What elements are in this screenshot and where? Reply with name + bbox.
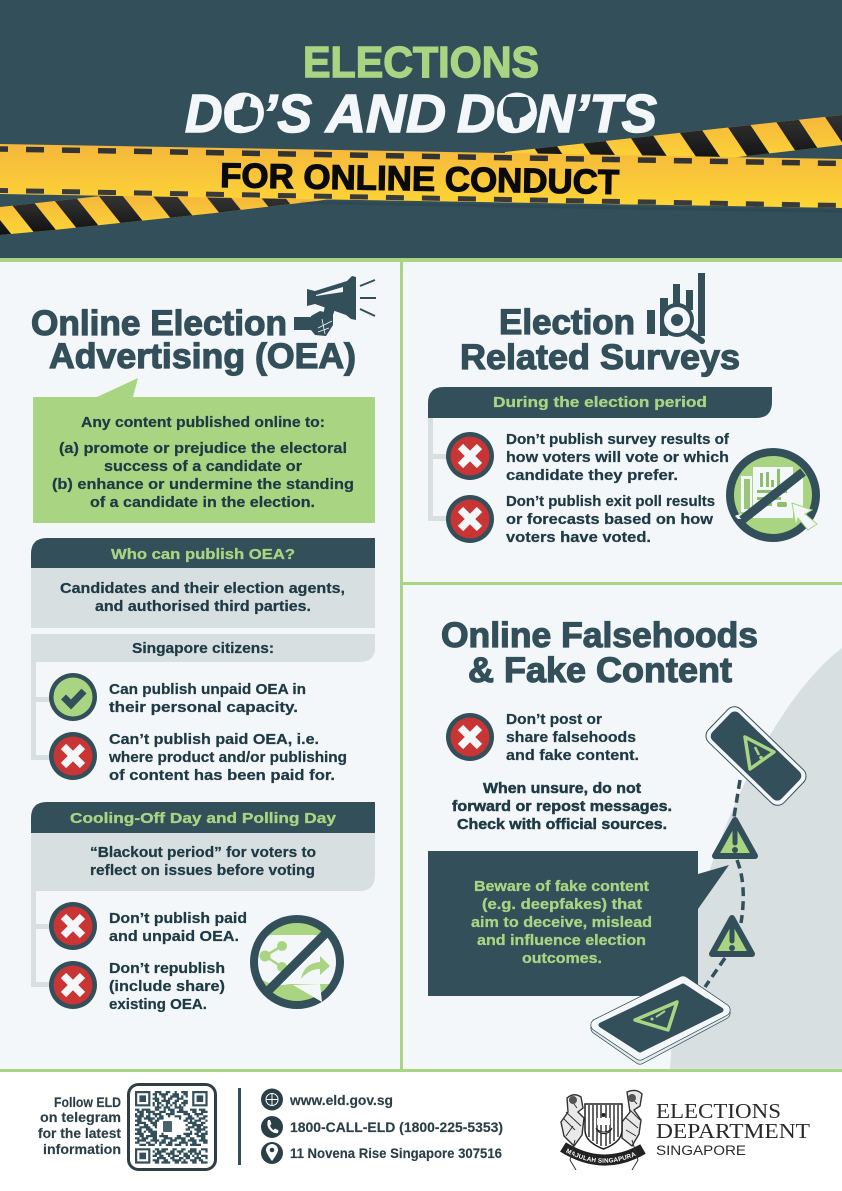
hazard tape front with text xyxy=(0,144,842,213)
connector xyxy=(428,418,448,521)
text: survey results: how voters will vote or which xyxy=(506,449,729,466)
shield xyxy=(585,1104,622,1149)
tape text: FOR ONLINE CONDUCT xyxy=(220,157,619,202)
page background panels xyxy=(0,258,842,1072)
icon: cross xyxy=(49,902,97,950)
banner xyxy=(563,1147,643,1160)
callout: beware of fake content: outcomes. xyxy=(522,950,602,967)
icon: globe xyxy=(261,1088,283,1110)
divider xyxy=(238,1088,241,1165)
icon: check xyxy=(49,673,97,721)
section: cooling-off day xyxy=(31,802,375,1013)
panel: online falsehoods xyxy=(428,616,842,1069)
callout: OEA definition: success of a candidate or xyxy=(104,458,302,475)
heading: election related surveys: Related Surveys xyxy=(460,338,740,377)
text: follow ELD: Follow ELD xyxy=(54,1095,121,1110)
heading: online election advertising: Advertising (OEA) xyxy=(49,337,356,376)
icon: no sharing xyxy=(254,919,342,1005)
icon: no survey publishing xyxy=(730,452,817,538)
text: follow ELD: for the latest xyxy=(38,1126,122,1141)
text: follow ELD: on telegram xyxy=(40,1110,121,1125)
callout: beware of fake content: Beware of fake content xyxy=(474,878,649,895)
icon: thumbs up in O xyxy=(224,92,264,132)
icon: phone bottom xyxy=(597,982,724,1058)
heading: election related surveys xyxy=(460,303,740,377)
icon: location pin xyxy=(261,1142,283,1164)
hazard tape behind, right piece xyxy=(505,115,842,158)
heading: election related surveys: Election xyxy=(499,303,635,342)
header: during the election period xyxy=(428,387,772,418)
panel dividers xyxy=(0,258,842,1072)
text: can publish xyxy=(109,681,306,716)
text: follow ELD xyxy=(38,1095,122,1157)
text: do not republish: existing OEA. xyxy=(109,996,207,1013)
text: do not republish: Don’t republish xyxy=(109,960,225,977)
title: ELECTIONS: ELECTIONS xyxy=(303,38,539,87)
header band xyxy=(0,0,842,258)
text: do not post: and fake content. xyxy=(506,747,639,764)
text: exit poll: Don’t publish exit poll results xyxy=(506,493,715,510)
callout: beware of fake content: and influence election xyxy=(477,932,646,949)
heading: online election advertising: Online Election xyxy=(31,304,287,343)
text: do not publish xyxy=(109,910,247,945)
text: survey results: Don’t publish survey results of xyxy=(506,431,730,448)
icon: cross xyxy=(446,432,494,480)
text: follow ELD: information xyxy=(43,1142,121,1157)
QR code xyxy=(128,1084,216,1170)
icon: chart with magnifier xyxy=(647,273,705,341)
logo text: ELECTIONS xyxy=(656,1099,781,1123)
text: exit poll xyxy=(506,493,715,546)
icon: cross xyxy=(446,713,494,761)
icon: cross xyxy=(49,961,97,1009)
callout: OEA definition xyxy=(33,378,375,523)
dashed route xyxy=(705,780,743,987)
logo: crest xyxy=(560,1090,646,1170)
text: do not publish: Don’t publish paid xyxy=(109,910,247,927)
section: singapore citizens xyxy=(31,634,375,784)
text: do not republish xyxy=(109,960,225,1013)
section: who can publish: Who can publish OEA? xyxy=(111,546,295,563)
header: during the election period: During the election period xyxy=(493,394,707,411)
footer xyxy=(38,1083,810,1171)
background arc xyxy=(670,648,842,1069)
heading: online falsehoods and fake content: Online Falsehoods xyxy=(441,616,758,655)
title: DO'S AND DON'TS xyxy=(185,84,657,144)
text: when unsure xyxy=(452,780,672,833)
lion xyxy=(561,1095,584,1146)
text: survey results xyxy=(506,431,730,484)
text: do not post: share falsehoods xyxy=(506,729,636,746)
logo text: SINGAPORE xyxy=(656,1143,746,1158)
icon: cross xyxy=(49,732,97,780)
title: DO'S AND DON'TS: DO’S xyxy=(185,84,312,144)
logo text xyxy=(656,1099,810,1158)
icon: megaphone with fist xyxy=(294,276,376,336)
text: do not post: Don’t post or xyxy=(506,711,602,728)
text: do not publish: and unpaid OEA. xyxy=(109,928,239,945)
logo text: DEPARTMENT xyxy=(656,1119,810,1143)
heading: online election advertising xyxy=(31,304,356,376)
section: cooling-off day: reflect on issues before voting xyxy=(90,862,315,879)
section: singapore citizens: Singapore citizens: xyxy=(132,640,274,657)
callout: OEA definition: Any content published online to: xyxy=(81,414,325,431)
callout: OEA definition: (a) promote or prejudice the electoral xyxy=(59,440,347,457)
text: can publish: their personal capacity. xyxy=(109,699,298,716)
text: when unsure: When unsure, do not xyxy=(483,780,641,797)
text: cannot publish: of content has been paid for. xyxy=(109,767,335,784)
text: exit poll: or forecasts based on how xyxy=(506,511,713,528)
text: phone number: 1800-CALL-ELD (1800-225-5353) xyxy=(290,1120,503,1135)
section: who can publish xyxy=(31,538,375,628)
icon: cross xyxy=(446,495,494,543)
heading: online falsehoods and fake content: & Fake Content xyxy=(468,651,732,690)
logo: crest: MAJULAH SINGAPURA xyxy=(566,1148,636,1163)
icon: warning triangle upper xyxy=(715,820,755,856)
icon: phone xyxy=(261,1116,283,1138)
text: can publish: Can publish unpaid OEA in xyxy=(109,681,306,698)
text: exit poll: voters have voted. xyxy=(506,529,651,546)
text: survey results: candidate they prefer. xyxy=(506,467,678,484)
title: DO'S AND DON'TS: DON’TS xyxy=(457,84,657,144)
panel: online election advertising xyxy=(31,273,842,1171)
text: website: www.eld.gov.sg xyxy=(289,1093,393,1108)
icon: warning triangle lower xyxy=(712,918,752,954)
callout: beware of fake content: (e.g. deepfakes) that xyxy=(482,896,642,913)
callout: OEA definition: (b) enhance or undermine the standing xyxy=(52,476,354,493)
section: who can publish: and authorised third parties. xyxy=(95,598,311,615)
text: when unsure: forward or repost messages. xyxy=(452,798,672,815)
panel: election related surveys xyxy=(428,273,817,546)
title: DO'S AND DON'TS: AND xyxy=(324,84,446,144)
tiger xyxy=(622,1090,642,1146)
text: cannot publish: Can’t publish paid OEA, i.e. xyxy=(109,731,319,748)
callout: beware of fake content: aim to deceive, mislead xyxy=(471,914,652,931)
text: when unsure: Check with official sources. xyxy=(457,816,667,833)
callout: beware of fake content xyxy=(428,851,729,996)
text: do not post xyxy=(506,711,639,764)
icon: phone top xyxy=(702,703,810,809)
icon: thumbs down in O xyxy=(497,92,537,132)
text: cannot publish xyxy=(108,731,347,784)
callout: OEA definition: of a candidate in the election. xyxy=(90,494,315,511)
section: who can publish: Candidates and their election agents, xyxy=(60,580,345,597)
text: do not republish: (include share) xyxy=(109,978,225,995)
heading: online falsehoods and fake content xyxy=(441,616,758,690)
section: cooling-off day: “Blackout period” for voters to xyxy=(90,844,316,861)
text: address: 11 Novena Rise Singapore 307516 xyxy=(290,1146,502,1161)
text: cannot publish: where product and/or publishing xyxy=(108,749,347,766)
section: cooling-off day: Cooling-Off Day and Polling Day xyxy=(70,810,337,827)
hazard tape behind, left piece xyxy=(0,196,328,235)
